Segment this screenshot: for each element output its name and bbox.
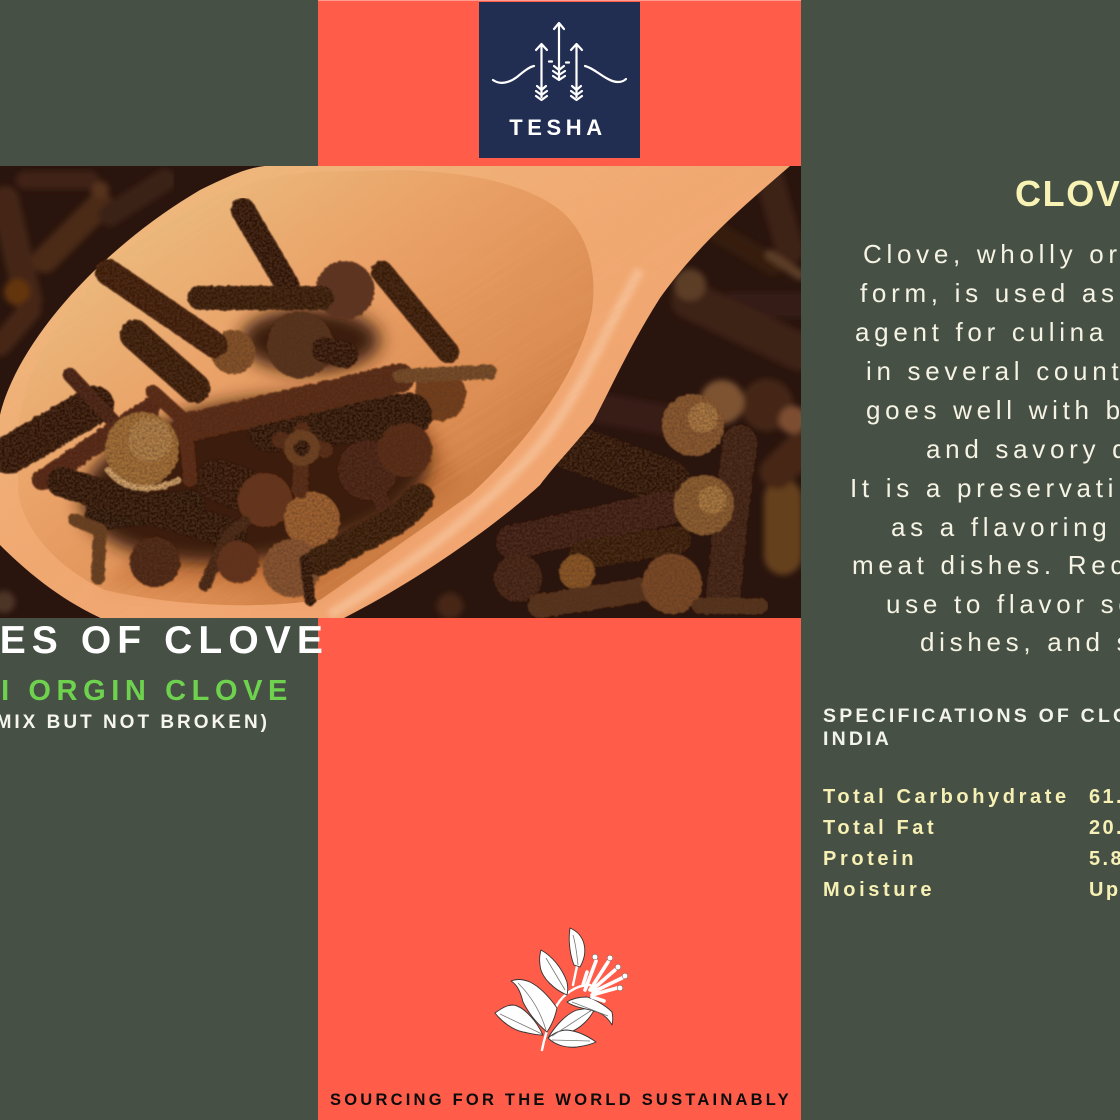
text block: clove description: goes well with b (866, 395, 1120, 425)
table: specifications: Total Carbohydrate (823, 786, 1070, 808)
subheading: origin: I ORGIN CLOVE (1, 675, 293, 707)
table: specifications (823, 786, 1120, 901)
heading: types of clove: ES OF CLOVE (0, 619, 329, 662)
right-side cloves (494, 394, 760, 614)
wooden spoon (0, 166, 790, 620)
shadow under spoon cloves (71, 308, 439, 584)
text block: clove description: Clove, wholly or (863, 239, 1120, 269)
text block: clove description: form, is used as (860, 278, 1119, 308)
logo: Tesha (479, 2, 640, 158)
heading: specifications (823, 705, 1120, 750)
text block: clove description: It is a preservati (850, 473, 1118, 503)
logo: Tesha: TESHA (509, 115, 607, 140)
background cloves, upper left and lower left (0, 180, 165, 613)
table: specifications: Protein (823, 848, 917, 870)
text block: clove description (850, 239, 1120, 657)
panel: coral centre column (318, 0, 801, 1120)
photo: cloves on a wooden spoon (0, 166, 801, 618)
text block: clove description: meat dishes. Rec (852, 550, 1120, 580)
spoon rim highlight (330, 270, 640, 615)
table: specifications: Total Fat (823, 817, 937, 839)
spoon bowl (18, 170, 593, 605)
illustration: clove branch (494, 928, 628, 1052)
table: specifications: Up (1089, 879, 1120, 901)
background cloves, right (437, 180, 807, 619)
table: specifications: Moisture (823, 879, 935, 901)
heading: specifications: INDIA (823, 728, 892, 750)
text block: clove description: in several count (866, 356, 1120, 386)
text block: clove description: agent for culina (855, 317, 1108, 347)
text block: clove description: as a flavoring (891, 512, 1111, 542)
bowl shading (105, 420, 460, 592)
note: grade: MIX BUT NOT BROKEN) (0, 712, 270, 733)
spoon cloves (8, 210, 490, 600)
tagline: SOURCING FOR THE WORLD SUSTAINABLY (330, 1091, 792, 1109)
